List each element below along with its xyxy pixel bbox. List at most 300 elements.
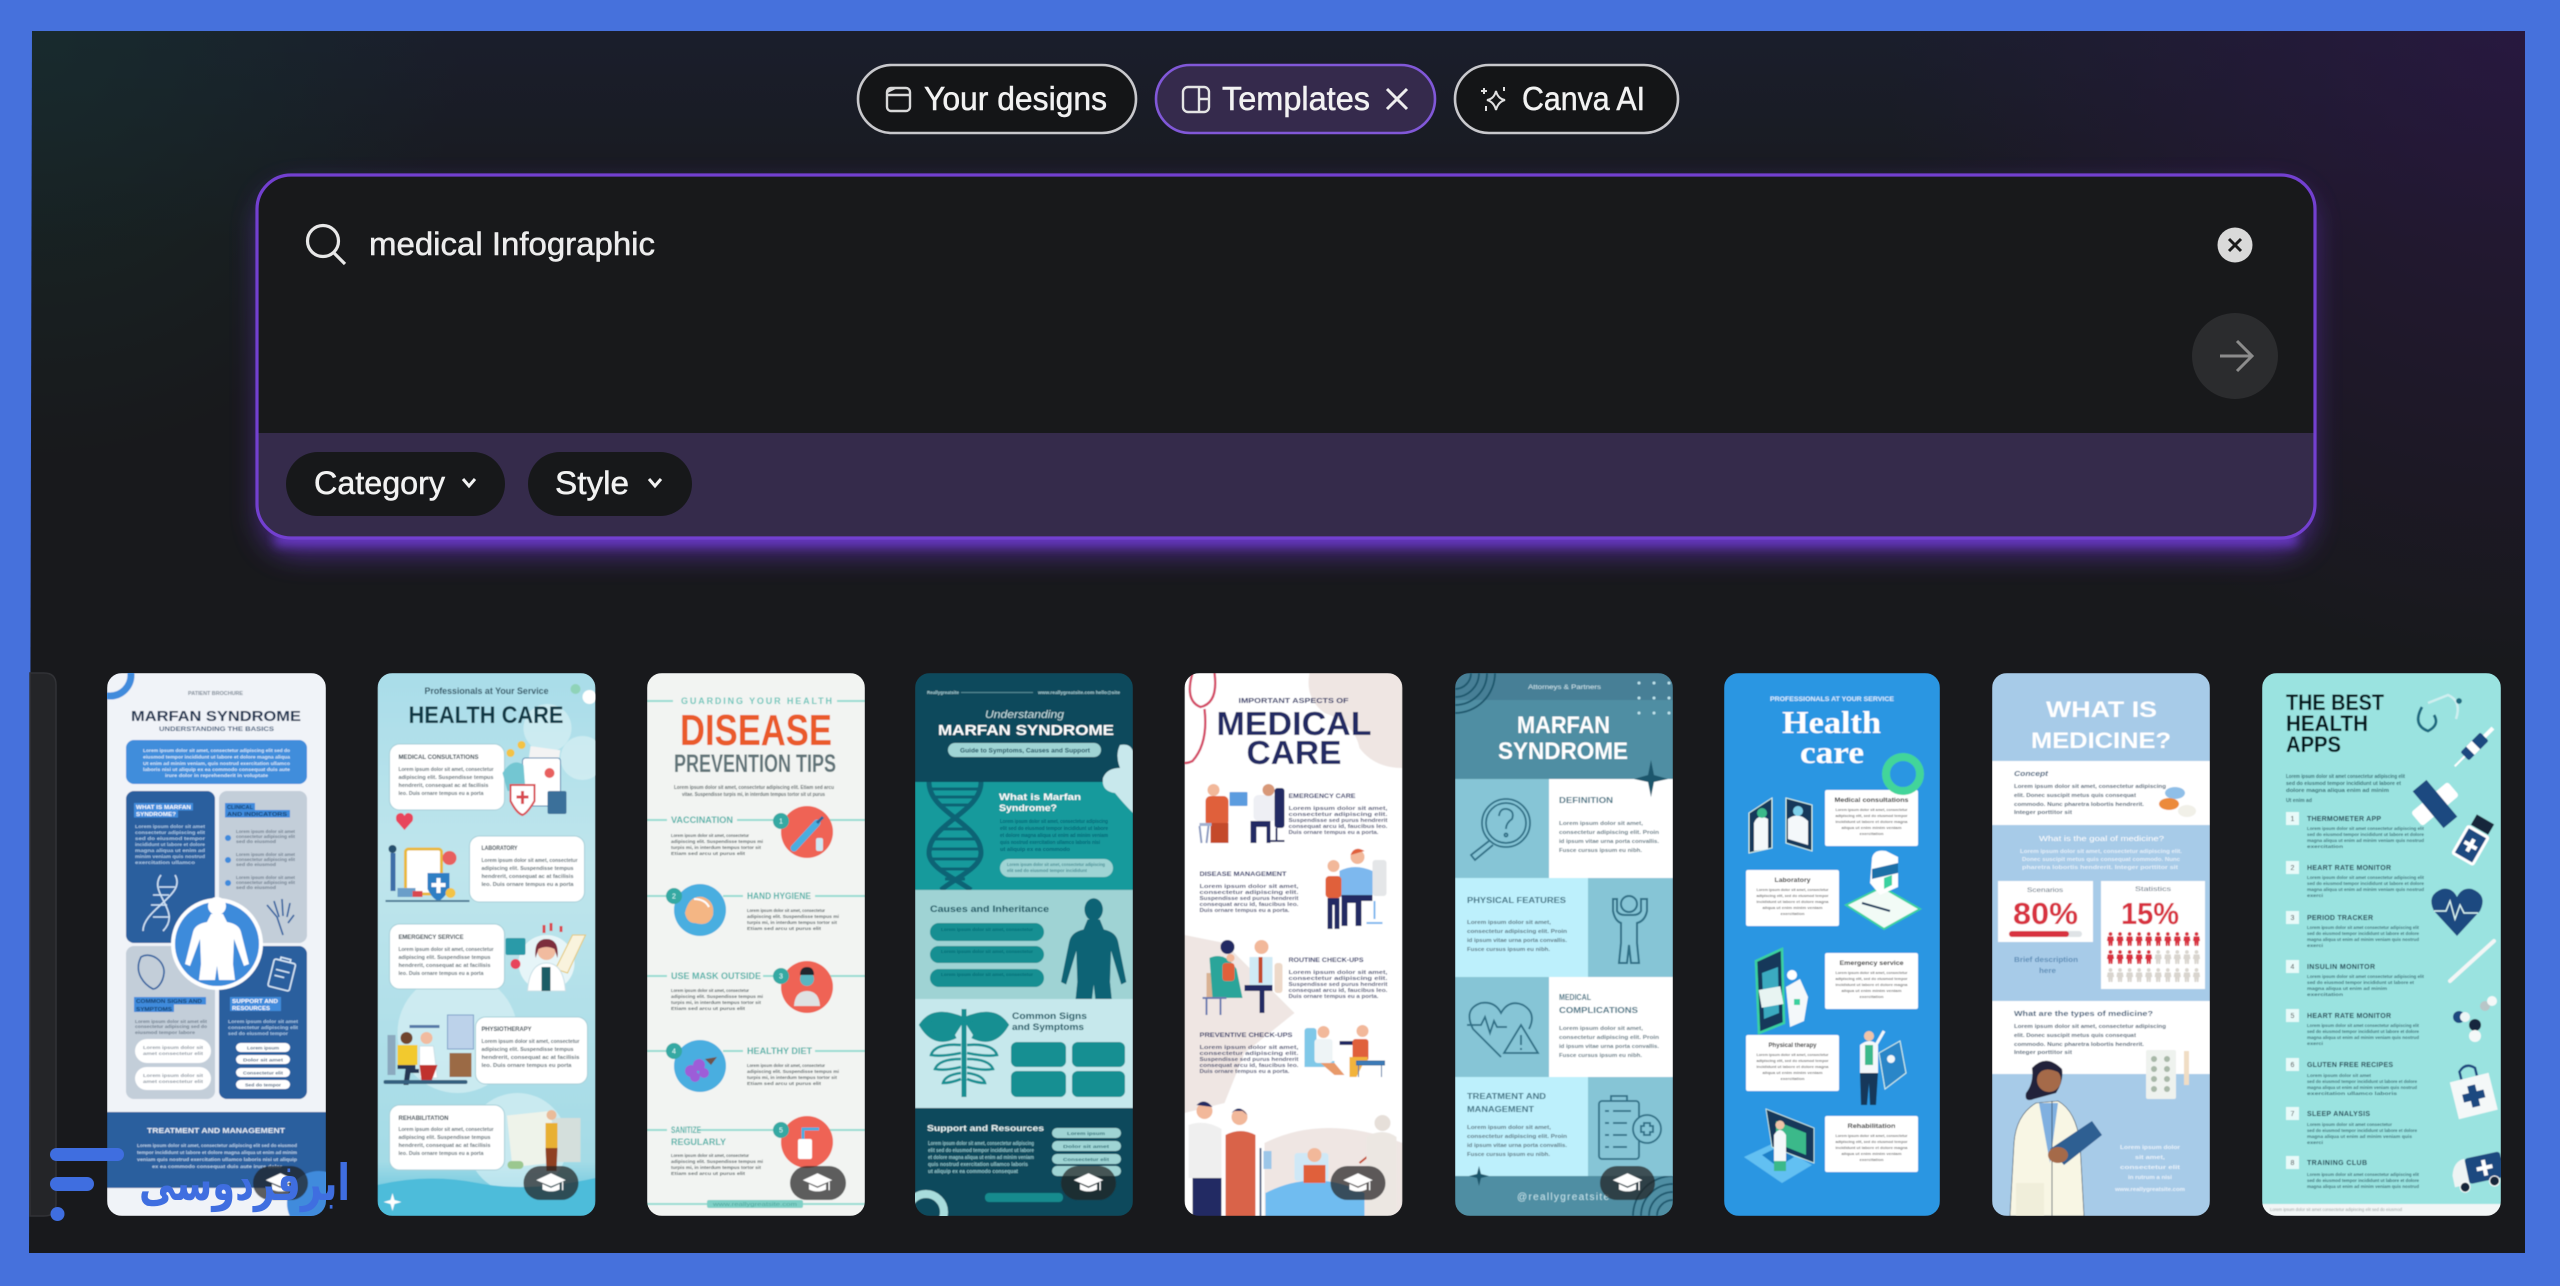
card: health care bbox=[378, 673, 604, 1216]
caption bbox=[2014, 957, 2078, 975]
panel: signs: consectetur adipiscing elit bbox=[236, 857, 296, 862]
card: marfan syndrome slate: MARFAN bbox=[1517, 712, 1610, 739]
row: treatment and management: id ipsum vitae urna porta convallis. bbox=[1467, 1143, 1568, 1149]
box: medical consultations bbox=[390, 744, 504, 810]
intro text: sed do eiusmod tempor incididunt ut labore et bbox=[2286, 781, 2401, 787]
card: medical care: CARE bbox=[1246, 734, 1342, 771]
list item 5 bbox=[2286, 1009, 2419, 1047]
header text: MARFAN SYNDROME bbox=[938, 722, 1114, 739]
list item 2: exerci bbox=[2307, 893, 2323, 899]
stat card: 80%: Scenarios bbox=[2027, 888, 2063, 894]
list item 5: exerci bbox=[2307, 1041, 2323, 1047]
filter bar bbox=[257, 433, 2315, 538]
band: concept: Lorem ipsum dolor sit amet, consectetur adipiscing bbox=[2014, 784, 2167, 790]
list item 3: Lorem ipsum dolor sit amet consectetur adipiscing elit bbox=[2307, 925, 2419, 931]
box: laboratory: hendrerit, consequat ac at facilisis bbox=[482, 874, 574, 880]
icon: person arms up bbox=[1613, 896, 1647, 963]
row: physical features bbox=[1455, 878, 1673, 977]
text: preventive check-ups: PREVENTIVE CHECK-UPS bbox=[1200, 1033, 1292, 1039]
wave bbox=[378, 1178, 596, 1211]
text: goal of medicine: pharetra lobortis hendrerit. Integer porttitor sit bbox=[2022, 865, 2178, 871]
box: emergency service: adipiscing elit, sed do eiusmod tempor bbox=[1836, 976, 1908, 981]
panel: signs bbox=[219, 791, 307, 943]
icon: medicine bottle bbox=[2451, 813, 2497, 867]
tip: healthy diet: Lorem ipsum dolor sit amet, consectetur bbox=[747, 1063, 825, 1069]
panel: signs: consectetur adipiscing elit bbox=[236, 834, 296, 839]
text: emergency care: consectetur adipiscing elit. bbox=[1288, 812, 1388, 818]
intro text: Lorem ipsum dolor sit amet consectetur adipiscing elit bbox=[2286, 774, 2405, 780]
list item 1: exercitation bbox=[2307, 844, 2343, 850]
tab: canva ai: Canva AI bbox=[1522, 80, 1645, 117]
box: laboratory: adipiscing elit. Suspendisse tempus bbox=[482, 866, 574, 872]
text: routine check-ups: Lorem ipsum dolor sit amet, bbox=[1288, 970, 1388, 976]
panel: complications: amet consectetur elit bbox=[143, 1051, 204, 1056]
section: support and resources: et dolore magna aliqua ut enim ad minim veniam bbox=[928, 1155, 1034, 1161]
box: rehabilitation bbox=[390, 1105, 504, 1170]
box: rehabilitation bbox=[1825, 1116, 1918, 1172]
section: support and resources bbox=[908, 1123, 1121, 1230]
band: types of medicine: commodo. Nunc pharetra lobortis hendrerit. bbox=[2014, 1042, 2144, 1048]
text: preventive check-ups bbox=[1200, 1033, 1299, 1075]
icon: pill pack bbox=[2146, 1050, 2189, 1099]
box: laboratory: adipiscing elit, sed do eiusmod tempor bbox=[1756, 893, 1829, 898]
tip: use mask outside: Etiam sed arcu ut purus elit bbox=[671, 1006, 745, 1012]
tip: sanitize regularly: REGULARLY bbox=[671, 1137, 726, 1147]
box: medical consultations: incididunt ut labore et dolore magna bbox=[1836, 819, 1908, 824]
text: disease management: DISEASE MANAGEMENT bbox=[1200, 872, 1287, 878]
box: rehabilitation: adipiscing elit, sed do eiusmod tempor bbox=[1836, 1139, 1908, 1144]
panel: what is marfan: magna aliqua ut enim ad bbox=[135, 848, 205, 853]
section: support and resources: ut aliquip ex ea commodo consequat bbox=[928, 1169, 1018, 1175]
text: preventive check-ups: Lorem ipsum dolor sit amet, bbox=[1200, 1045, 1299, 1051]
badge: graduation cap bbox=[1330, 1166, 1386, 1200]
list item 3: magna aliqua ut enim ad minim veniam quis nostrud bbox=[2307, 937, 2419, 943]
box: rehabilitation: adipiscing elit. Suspendisse tempus bbox=[398, 1135, 491, 1141]
icon: template layout bbox=[1183, 87, 1209, 112]
icon: syringe bbox=[2450, 724, 2497, 771]
box: emergency service: incididunt ut labore et dolore magna bbox=[1836, 982, 1908, 987]
list item 5: sed do eiusmod tempor incididunt ut labore et dolore bbox=[2307, 1029, 2419, 1035]
panel: what is marfan bbox=[126, 791, 215, 943]
tip: sanitize regularly: SANITIZE bbox=[671, 1125, 701, 1135]
list item 1: THERMOMETER APP bbox=[2307, 816, 2381, 823]
icon: four point star bbox=[1634, 760, 1668, 797]
search query text: medical Infographic bbox=[369, 226, 655, 262]
tip: sanitize regularly bbox=[671, 1116, 833, 1177]
card: health care blue: care bbox=[1800, 734, 1864, 770]
header text bbox=[927, 690, 1121, 757]
band: concept: elit. Donec suscipit metus quis consequat bbox=[2014, 793, 2136, 799]
tip: healthy diet: 4 bbox=[672, 1048, 676, 1056]
tip: use mask outside: 3 bbox=[779, 974, 783, 980]
band: types of medicine: Lorem ipsum dolor sit amet, consectetur adipiscing bbox=[2014, 1024, 2167, 1030]
panel: complications: Lorem ipsum dolor sit bbox=[143, 1073, 204, 1078]
row: definition: consectetur adipiscing elit. Proin bbox=[1559, 830, 1659, 836]
text: emergency care: Duis ornare tempus eu a porta. bbox=[1288, 830, 1379, 836]
tip: sanitize regularly: adipiscing elit. Suspendisse tempus mi bbox=[671, 1159, 763, 1165]
heading bbox=[2286, 690, 2384, 757]
icon: stethoscope bbox=[2418, 695, 2460, 731]
icon: capsules bbox=[2453, 996, 2497, 1042]
panel: signs: Lorem ipsum dolor sit amet bbox=[236, 875, 295, 880]
text: routine check-ups: consectetur adipiscing elit. bbox=[1288, 976, 1388, 982]
section: support and resources: Dolor sit amet bbox=[1063, 1144, 1110, 1149]
stat card: 80%: 80% bbox=[2013, 896, 2078, 931]
list item 3: 3 bbox=[2291, 915, 2295, 922]
intro box: Ut enim ad minim veniam, quis nostrud exercitation ullamco bbox=[143, 761, 290, 767]
intro box bbox=[126, 740, 307, 784]
heading: HEALTH bbox=[2286, 711, 2368, 736]
closing text: Lorem ipsum dolor bbox=[2120, 1145, 2181, 1151]
box: laboratory bbox=[1746, 870, 1839, 926]
box: physical therapy: Lorem ipsum dolor sit amet, consectetur bbox=[1756, 1052, 1829, 1057]
search box bbox=[257, 175, 2315, 538]
text: goal of medicine: What is the goal of medicine? bbox=[2039, 836, 2164, 843]
box: medical consultations: leo. Duis ornare tempus eu a porta bbox=[398, 791, 484, 797]
tip: healthy diet: turpis mi, in interdum tempus tortor sit bbox=[747, 1075, 837, 1081]
card: disease prevention: DISEASE bbox=[680, 706, 832, 755]
tip: hand hygiene: HAND HYGIENE bbox=[747, 891, 811, 901]
section: what is marfan: elit sed do eiusmod tempor incididunt ut labore bbox=[1000, 826, 1108, 832]
card: health care: HEALTH CARE bbox=[408, 702, 564, 729]
panel: complications: SYMPTOMS bbox=[136, 1007, 173, 1013]
box: rehabilitation: Lorem ipsum dolor sit amet, consectetur bbox=[398, 1127, 494, 1133]
list item 6: 6 bbox=[2291, 1062, 2295, 1069]
card: what is medicine: MEDICINE? bbox=[2031, 728, 2171, 753]
tip: vaccination: 1 bbox=[779, 818, 783, 826]
row: treatment and management: TREATMENT AND bbox=[1467, 1092, 1546, 1101]
text: disease management: consectetur adipiscing elit. bbox=[1200, 890, 1299, 896]
box: physical therapy: adipiscing elit, sed do eiusmod tempor bbox=[1756, 1058, 1829, 1063]
row: physical features: consectetur adipiscing elit. Proin bbox=[1467, 929, 1567, 935]
box: laboratory: exercitation bbox=[1780, 911, 1805, 916]
illustration: doctor bbox=[2010, 1061, 2102, 1216]
stat card: 15% with people grid: 15% bbox=[2121, 896, 2179, 931]
badge: graduation cap bbox=[790, 1166, 846, 1200]
text: emergency care: consequat arcu id, faucibus leo. bbox=[1288, 824, 1388, 830]
closing text: sit amet, bbox=[2135, 1155, 2165, 1161]
list item 3: sed do eiusmod tempor incididunt ut labore et dolore bbox=[2307, 931, 2419, 937]
list item 6: sed do eiusmod tempor incididunt ut labore et dolore bbox=[2307, 1079, 2417, 1085]
card: marfan syndrome blue: PATIENT BROCHURE bbox=[188, 691, 243, 697]
list item 1: sed do eiusmod tempor incididunt ut labore et dolore bbox=[2307, 832, 2424, 838]
card: what is medicine bbox=[1992, 673, 2210, 1216]
section: causes and inheritance bbox=[915, 890, 1133, 1002]
panel: signs: sed do eiusmod bbox=[236, 839, 276, 844]
list item 1: Lorem ipsum dolor sit amet consectetur adipiscing elit bbox=[2307, 826, 2424, 832]
illustration: physiotherapy scene bbox=[384, 1015, 474, 1085]
box: physical therapy bbox=[1746, 1035, 1839, 1091]
row: definition: id ipsum vitae urna porta convallis. bbox=[1559, 839, 1660, 845]
list item 8: TRAINING CLUB bbox=[2307, 1160, 2367, 1167]
row: definition: Lorem ipsum dolor sit amet, bbox=[1559, 821, 1644, 827]
icon: hand bones bbox=[267, 899, 294, 935]
panel: support: consectetur adipiscing elit bbox=[228, 1025, 299, 1030]
tip: use mask outside: adipiscing elit. Suspendisse tempus mi bbox=[671, 994, 763, 1000]
panel: what is marfan: incididunt ut labore et dolore bbox=[135, 842, 205, 847]
tip: sanitize regularly: Etiam sed arcu ut purus elit bbox=[671, 1171, 745, 1177]
box: emergency service: hendrerit, consequat ac at facilisis bbox=[398, 963, 491, 969]
box: laboratory: LABORATORY bbox=[482, 846, 518, 852]
band: concept bbox=[1992, 761, 2210, 825]
panel: complications: amet consectetur elit bbox=[143, 1079, 204, 1084]
box: emergency service: adipiscing elit. Suspendisse tempus bbox=[398, 955, 491, 961]
list item 3: PERIOD TRACKER bbox=[2307, 915, 2373, 922]
tab: canva ai bbox=[1455, 65, 1678, 133]
panel: support: Lorem ipsum bbox=[247, 1046, 279, 1050]
box: rehabilitation: hendrerit, consequat ac at facilisis bbox=[398, 1143, 491, 1149]
text: emergency care: Lorem ipsum dolor sit amet, bbox=[1288, 806, 1388, 812]
tip: vaccination: VACCINATION bbox=[671, 815, 733, 825]
panel: what is marfan: minim veniam quis nostrud bbox=[135, 854, 205, 859]
text: goal of medicine bbox=[2020, 836, 2183, 871]
tip: vaccination: Etiam sed arcu ut purus elit bbox=[671, 851, 745, 857]
card: disease prevention: vitae. Suspendisse turpis mi, in interdum tempus tortor sit ut purus bbox=[682, 792, 825, 798]
row: treatment and management: Lorem ipsum dolor sit amet, bbox=[1467, 1125, 1552, 1131]
band: concept: Integer porttitor sit bbox=[2014, 810, 2072, 816]
scene: emergency care bbox=[1200, 784, 1284, 843]
illustration: rehabilitation figure bbox=[507, 1110, 580, 1171]
scene: routine check-ups bbox=[1202, 940, 1282, 1015]
badge: graduation cap bbox=[1600, 1166, 1655, 1200]
heading: APPS bbox=[2286, 732, 2341, 757]
heading: MARFAN SYNDROME bbox=[131, 708, 301, 725]
box: laboratory: incididunt ut labore et dolore magna bbox=[1756, 899, 1829, 904]
intro text bbox=[2286, 774, 2405, 804]
tip: vaccination bbox=[671, 806, 833, 858]
panel: what is marfan: consectetur adipiscing elit bbox=[135, 830, 206, 835]
header text: Reallygreatsite bbox=[927, 690, 959, 695]
icon: clipboard outline bbox=[268, 956, 297, 991]
icon: ambulance bbox=[2450, 1151, 2506, 1194]
tip: vaccination: turpis mi, in interdum tempus tortor sit bbox=[671, 845, 761, 851]
box: emergency service: Lorem ipsum dolor sit amet, consectetur bbox=[398, 947, 494, 953]
illustration: doctor in circle bbox=[506, 923, 586, 991]
row: physical features: PHYSICAL FEATURES bbox=[1467, 896, 1567, 905]
list item 7 bbox=[2286, 1107, 2417, 1146]
header text: www.reallygreatsite.com hello@site bbox=[1037, 690, 1121, 695]
illustration: rehabilitation platform bbox=[1744, 1109, 1814, 1183]
list item 8: Lorem ipsum dolor sit amet consectetur adipiscing elit bbox=[2307, 1172, 2419, 1178]
footer handle: @reallygreatsite bbox=[1517, 1192, 1609, 1203]
card: best health apps bbox=[2262, 673, 2506, 1216]
box: physiotherapy: leo. Duis ornare tempus eu porta bbox=[482, 1063, 572, 1069]
footer pill: www.reallygreatsite.com bbox=[713, 1202, 797, 1208]
panel: support: Sed do tempor bbox=[245, 1082, 281, 1088]
row: treatment and management: MANAGEMENT bbox=[1467, 1105, 1534, 1114]
list item 2: HEART RATE MONITOR bbox=[2307, 865, 2391, 872]
box: medical consultations: Lorem ipsum dolor sit amet, consectetur bbox=[398, 767, 494, 773]
partial card at left edge bbox=[30, 673, 56, 1216]
box: medical consultations: hendrerit, consequat ac at facilisis bbox=[398, 783, 489, 789]
intro box: Lorem ipsum dolor sit amet, consectetur adipiscing elit sed do bbox=[143, 748, 290, 754]
box: physiotherapy: Lorem ipsum dolor sit amet, consectetur bbox=[482, 1039, 580, 1045]
list item 7: magna aliqua ut enim ad minim veniam quis bbox=[2307, 1134, 2412, 1140]
row: medical complications: COMPLICATIONS bbox=[1559, 1006, 1639, 1015]
dropdown: style bbox=[528, 452, 692, 516]
panel: support bbox=[219, 946, 307, 1099]
dropdown: category: Category bbox=[314, 465, 445, 501]
text: routine check-ups: consequat arcu id, faucibus leo. bbox=[1288, 988, 1388, 994]
list item 6 bbox=[2286, 1058, 2417, 1097]
logo mark: bars and dot bbox=[50, 1148, 124, 1221]
text: routine check-ups: ROUTINE CHECK-UPS bbox=[1288, 958, 1364, 964]
icon: green ring bbox=[1886, 757, 1920, 791]
panel: complications bbox=[126, 946, 215, 1099]
icon: stethoscope bbox=[1180, 673, 1215, 763]
panel: support: SUPPORT AND bbox=[232, 999, 278, 1005]
card: medical care bbox=[1180, 673, 1402, 1216]
tip: healthy diet: adipiscing elit. Suspendisse tempus mi bbox=[747, 1069, 839, 1075]
box: emergency service: exercitation bbox=[1860, 994, 1884, 999]
section: what is marfan: quis nostrud exercitation ullamco laboris nisi bbox=[1000, 840, 1101, 846]
box: rehabilitation: aliqua ut enim minim veniam bbox=[1842, 1151, 1902, 1156]
row: treatment and management: Fusce cursus ipsum eu nibh. bbox=[1467, 1152, 1551, 1158]
stat card: 80% bbox=[1998, 881, 2093, 942]
tip: hand hygiene: adipiscing elit. Suspendisse tempus mi bbox=[747, 914, 839, 920]
text: disease management: Suspendisse sed purus hendrerit bbox=[1200, 896, 1299, 902]
icon: sparkle bbox=[1481, 87, 1505, 111]
panel: support: RESOURCES bbox=[232, 1006, 271, 1012]
text: preventive check-ups: consequat arcu id, faucibus leo. bbox=[1200, 1063, 1299, 1069]
tip: healthy diet bbox=[666, 1040, 839, 1092]
box: rehabilitation: incididunt ut labore et dolore magna bbox=[1836, 1145, 1908, 1150]
intro box: irure dolor in reprehenderit in voluptate bbox=[165, 773, 268, 779]
card: marfan syndrome teal bbox=[908, 673, 1133, 1230]
icon: dna outline bbox=[143, 875, 177, 931]
icon: pills bbox=[2159, 787, 2196, 817]
panel: support: Dolor sit amet bbox=[243, 1058, 284, 1062]
list item 5: Lorem ipsum dolor sit amet consectetur adipiscing elit bbox=[2307, 1023, 2419, 1029]
row: treatment and management: consectetur adipiscing elit. Proin bbox=[1467, 1134, 1567, 1140]
box: medical consultations: aliqua ut enim minim veniam bbox=[1842, 825, 1902, 830]
header text: Guide to Symptoms, Causes and Support bbox=[960, 748, 1090, 754]
list item 8: 8 bbox=[2291, 1160, 2295, 1167]
row: physical features: id ipsum vitae urna porta convallis. bbox=[1467, 938, 1568, 944]
row: physical features: Lorem ipsum dolor sit amet, bbox=[1467, 920, 1552, 926]
list item 2 bbox=[2286, 861, 2424, 899]
text: emergency care: Suspendisse sed purus hendrerit bbox=[1288, 818, 1388, 824]
illustration: video consultation bbox=[1749, 798, 1812, 853]
text: preventive check-ups: Duis ornare tempus eu a porta. bbox=[1200, 1069, 1290, 1075]
panel: complications: eiusmod tempor labore bbox=[135, 1030, 196, 1035]
icon: body in circle bbox=[171, 897, 263, 990]
box: emergency service bbox=[390, 924, 504, 989]
section: common signs: and Symptoms bbox=[1012, 1022, 1084, 1032]
list item 6: GLUTEN FREE RECIPES bbox=[2307, 1062, 2393, 1069]
panel: what is marfan: Lorem ipsum dolor sit amet bbox=[135, 824, 206, 829]
row: medical complications bbox=[1455, 977, 1673, 1077]
button: submit arrow bbox=[2192, 313, 2278, 399]
section: causes and inheritance: Causes and Inheritance bbox=[930, 904, 1049, 914]
box: rehabilitation: REHABILITATION bbox=[398, 1116, 448, 1122]
tip: sanitize regularly: 5 bbox=[779, 1128, 783, 1134]
tip: use mask outside: Lorem ipsum dolor sit amet, consectetur bbox=[671, 988, 749, 994]
section: support and resources: Lorem ipsum bbox=[1067, 1131, 1105, 1136]
box: laboratory: leo. Duis ornare tempus eu a porta bbox=[482, 882, 574, 888]
illustration: lab device bbox=[1846, 851, 1920, 929]
text: goal of medicine: Lorem ipsum dolor sit amet, consectetur adipiscing elit. bbox=[2020, 849, 2183, 855]
box: physical therapy: incididunt ut labore et dolore magna bbox=[1756, 1064, 1829, 1069]
footer strip bbox=[2262, 1204, 2501, 1216]
text: emergency care: EMERGENCY CARE bbox=[1288, 794, 1356, 800]
tip: hand hygiene: Etiam sed arcu ut purus elit bbox=[747, 926, 821, 932]
footer band: TREATMENT AND MANAGEMENT bbox=[147, 1128, 286, 1135]
list item 7: Lorem ipsum dolor sit amet consectetur bbox=[2307, 1122, 2392, 1128]
list item 7: SLEEP ANALYSIS bbox=[2307, 1111, 2370, 1118]
text: disease management: Duis ornare tempus eu a porta. bbox=[1200, 908, 1290, 914]
list item 1: magna aliqua ut enim ad minim veniam quis nostrud bbox=[2307, 838, 2424, 844]
icon: first aid kit bbox=[2447, 1061, 2498, 1119]
panel: what is marfan: sed do eiusmod tempor bbox=[135, 836, 205, 841]
closing text: consectetur elit bbox=[2120, 1165, 2180, 1171]
heading: IMPORTANT ASPECTS OF bbox=[1238, 696, 1349, 705]
box: laboratory: aliqua ut enim minim veniam bbox=[1762, 905, 1823, 910]
icon: thermometer bbox=[2450, 941, 2494, 981]
row: definition: DEFINITION bbox=[1559, 796, 1613, 805]
list item 4: Lorem ipsum dolor sit amet consectetur adipiscing elit bbox=[2307, 974, 2424, 980]
section: causes and inheritance: Lorem ipsum dolor sit amet, consectetur bbox=[941, 927, 1033, 932]
icon: close tab bbox=[1387, 89, 1407, 109]
badge: graduation cap bbox=[1061, 1166, 1116, 1200]
row: medical complications: MEDICAL bbox=[1559, 993, 1591, 1002]
text: goal of medicine: Donec suscipit metus quis consequat commodo. Nunc bbox=[2022, 857, 2180, 863]
tip: use mask outside bbox=[671, 961, 833, 1013]
badge: graduation cap bbox=[524, 1166, 578, 1200]
list item 4 bbox=[2286, 960, 2424, 998]
section: causes and inheritance: Lorem ipsum dolor sit amet, consectetur bbox=[941, 949, 1033, 954]
icon: search magnifier bbox=[308, 226, 345, 264]
tab: your designs: Your designs bbox=[924, 80, 1107, 117]
list item 4: INSULIN MONITOR bbox=[2307, 964, 2375, 971]
list item 5: 5 bbox=[2291, 1013, 2295, 1020]
box: physiotherapy: PHYSIOTHERAPY bbox=[482, 1027, 532, 1033]
box: emergency service: Lorem ipsum dolor sit amet, consectetur bbox=[1836, 970, 1908, 975]
box: laboratory: Lorem ipsum dolor sit amet, consectetur bbox=[482, 858, 578, 864]
section: what is marfan: Lorem ipsum dolor sit amet, consectetur adipiscing bbox=[1000, 819, 1108, 825]
panel: signs: consectetur adipiscing elit bbox=[236, 880, 296, 885]
panel: complications: Lorem ipsum dolor sit amet elit bbox=[135, 1019, 208, 1024]
section: what is marfan: ut aliquip ex ea commodo bbox=[1000, 847, 1070, 853]
card: health care blue: Health bbox=[1782, 704, 1881, 740]
icon: red heart bbox=[396, 813, 413, 830]
footer band: tempor incididunt ut labore et dolore magna aliqua ut enim ad minim bbox=[137, 1150, 297, 1156]
list item 4: exercitation bbox=[2307, 992, 2343, 998]
section: common signs bbox=[915, 999, 1133, 1108]
search box glow bbox=[262, 190, 2310, 552]
header text: Understanding bbox=[985, 709, 1065, 721]
closing text bbox=[2114, 1145, 2185, 1193]
tip: vaccination: Lorem ipsum dolor sit amet, consectetur bbox=[671, 833, 749, 839]
panel: complications: Lorem ipsum dolor sit bbox=[143, 1045, 204, 1050]
panel: signs: sed do eiusmod bbox=[236, 862, 276, 867]
card: disease prevention bbox=[647, 673, 865, 1216]
box: medical consultations: adipiscing elit, sed do eiusmod tempor bbox=[1836, 813, 1908, 818]
panel: complications: consectetur adipiscing sed do bbox=[135, 1024, 207, 1029]
illustration: shield and tools bbox=[386, 845, 470, 902]
footer strip: Lorem ipsum dolor sit amet consectetur adipiscing elit sed do eiusmod bbox=[2270, 1207, 2402, 1212]
list item 3: exerci bbox=[2307, 943, 2323, 949]
box: laboratory bbox=[470, 836, 584, 902]
icon: clear search bbox=[2218, 228, 2252, 262]
heading: Attorneys & Partners bbox=[1528, 684, 1602, 691]
section: what is marfan: Lorem ipsum dolor sit amet, consectetur adipiscing bbox=[1007, 862, 1105, 867]
icon: folder bbox=[887, 88, 910, 111]
closing text: in rutrum a nisi bbox=[2128, 1175, 2172, 1181]
tip: hand hygiene bbox=[666, 884, 839, 936]
decorative blob bbox=[1103, 745, 1133, 813]
section: what is marfan: Syndrome? bbox=[999, 803, 1057, 813]
